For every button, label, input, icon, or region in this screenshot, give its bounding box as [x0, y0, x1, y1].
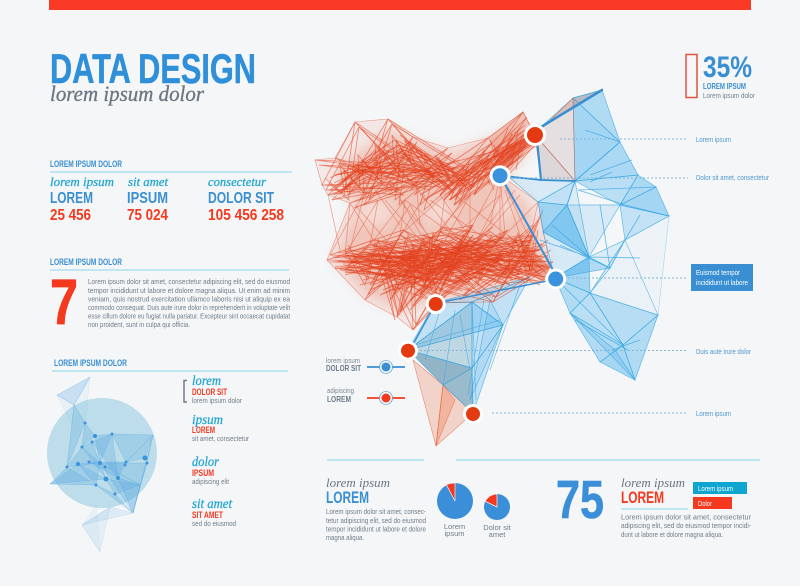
callout box: Euismod tempor	[696, 268, 740, 277]
bar: lorem ipsum	[693, 482, 747, 494]
panel: key figures: DOLOR SIT	[208, 190, 274, 207]
legend: lorem: LOREM	[327, 394, 351, 404]
chart: small network in circle	[47, 377, 157, 552]
text block: bottom left: tempor incididunt ut labore et dolore	[326, 524, 426, 534]
big number 75: 75	[556, 470, 604, 530]
legend: dolor sit: lorem ipsum	[326, 356, 360, 365]
legend list: network categories: lorem	[192, 374, 221, 389]
connecting thick blue lines	[411, 90, 602, 348]
panel: key figures: LOREM	[50, 190, 93, 207]
bottom rules	[327, 459, 760, 461]
map labels: Lorem ipsum	[696, 135, 731, 144]
legend list: network categories: dolor	[192, 455, 219, 470]
legend list: network categories: sit amet	[192, 497, 233, 512]
legend list: network categories: IPSUM	[192, 468, 214, 478]
map nodes	[400, 126, 565, 422]
map labels: Dolor sit amet, consectetur	[696, 173, 769, 182]
leader lines	[420, 139, 688, 413]
bar: dolor: Dolor	[698, 499, 712, 508]
panel: key figures: consectetur	[208, 174, 267, 189]
panel: key figures: lorem ipsum	[50, 174, 114, 189]
legend list: network categories: lorem ipsum dolor	[192, 396, 242, 405]
bar: dolor	[693, 497, 732, 509]
chart: pie one	[437, 483, 473, 538]
lower blue mesh	[408, 277, 530, 413]
legend list: network categories: ipsum	[192, 413, 223, 428]
panel: small network heading: LOREM IPSUM DOLOR	[54, 358, 127, 368]
bar: lorem ipsum: Lorem ipsum	[698, 484, 733, 493]
panel: number seven text: LOREM IPSUM DOLOR	[50, 257, 122, 267]
panel: key figures: sit amet	[128, 174, 168, 189]
chart: pie one: ipsum	[444, 529, 465, 538]
panel: key figures: 25 456	[50, 207, 91, 224]
panel: number seven text: Lorem ipsum dolor sit amet, consectetur adipiscing elit, sed do eiusmod	[88, 277, 290, 286]
text block: bottom right: lorem ipsum	[621, 475, 685, 490]
red right fills	[490, 135, 550, 282]
chart: pie two	[483, 494, 512, 539]
text block: bottom left: LOREM	[326, 489, 369, 507]
legend list: network categories: adipiscing elit	[192, 477, 230, 486]
panel: number seven text: commodo consequat. Duis aute irure dolor in reprehenderit in voluptate velit	[88, 303, 291, 312]
text block: bottom right	[621, 475, 751, 539]
legend list: network categories	[192, 374, 249, 528]
panel: key figures	[50, 159, 292, 224]
panel: key figures: 105 456 258	[208, 207, 284, 224]
text block: bottom right: LOREM	[621, 489, 664, 507]
panel: number seven text: veniam, quis nostrud exercitation ullamco laboris nisi ut aliquip ex ea	[88, 294, 291, 304]
map labels: Duis aute irure dolor	[696, 347, 751, 356]
chart: pie two: Dolor sit	[483, 523, 512, 532]
text block: bottom right: dunt ut labore et dolore magna aliqua.	[621, 530, 723, 539]
panel: key figures: IPSUM	[127, 190, 168, 207]
red upper mesh second layer	[319, 117, 539, 210]
panel: key figures: LOREM IPSUM DOLOR	[50, 159, 122, 169]
text block: bottom left: tetur adipiscing elit, sed do eiusmod	[326, 516, 426, 525]
callout box: incididunt ut labore	[696, 278, 748, 287]
title: lorem ipsum dolor	[50, 81, 204, 106]
chart: pie one: Lorem	[444, 522, 465, 531]
callout: 35 percent: 35%	[703, 51, 752, 84]
red lower mesh	[327, 215, 550, 330]
text block: bottom left: Lorem ipsum dolor sit amet, consec-	[326, 507, 426, 516]
text block: bottom left: magna aliqua.	[326, 533, 364, 542]
pink soft underlay	[335, 125, 545, 310]
red connecting mesh	[328, 170, 538, 255]
upper blue mesh	[510, 90, 669, 380]
title	[50, 45, 256, 106]
text block: bottom left: lorem ipsum	[326, 475, 390, 490]
callout: 35 percent: LOREM IPSUM	[703, 82, 746, 91]
pale pockets	[357, 196, 515, 226]
red outline and base planes	[315, 112, 550, 330]
text block: bottom left	[326, 475, 426, 542]
red upper mesh	[315, 112, 535, 205]
title: DATA DESIGN	[50, 45, 256, 92]
callout: 35 percent	[686, 51, 755, 100]
legend: dolor sit	[326, 356, 405, 374]
map labels	[696, 135, 769, 418]
icon: bracket	[184, 380, 187, 402]
heavy red band	[335, 140, 540, 282]
map labels: Lorem ipsum	[696, 409, 731, 418]
legend: lorem	[327, 386, 405, 404]
panel: number seven text: tempor incididunt ut labore et dolore magna aliqua. Ut enim ad minim	[88, 286, 290, 295]
panel: number seven text: esse cillum dolore eu fugiat nulla pariatur. Excepteur sint occaecat cupidatat	[88, 312, 291, 320]
legend: lorem: adipiscing	[327, 386, 354, 395]
text block: bottom right: adipiscing elit, sed do eiusmod tempor incidi-	[621, 521, 751, 530]
panel: number seven text: non proident, sunt in culpa qui officia.	[88, 320, 190, 329]
text block: bottom right: Lorem ipsum dolor sit amet, consectetur	[621, 512, 751, 522]
chart: pie two: amet	[489, 530, 506, 539]
callout: 35 percent: Lorem ipsum dolor	[703, 91, 755, 100]
orange lower wedge	[413, 360, 473, 446]
red lower mesh second layer	[330, 210, 553, 325]
top bar	[49, 0, 751, 10]
panel: key figures: 75 024	[127, 207, 168, 224]
panel: number seven text: 7	[50, 266, 78, 338]
callout box	[691, 264, 753, 291]
legend list: network categories: DOLOR SIT	[192, 387, 227, 397]
legend list: network categories: LOREM	[192, 425, 215, 435]
panel: number seven text	[50, 257, 291, 338]
legend list: network categories: sed do eiusmod	[192, 519, 236, 528]
chart: large network map	[315, 90, 669, 446]
legend: dolor sit: DOLOR SIT	[326, 363, 362, 373]
legend list: network categories: SIT AMET	[192, 510, 223, 520]
legend list: network categories: sit amet, consectetur	[192, 434, 249, 443]
